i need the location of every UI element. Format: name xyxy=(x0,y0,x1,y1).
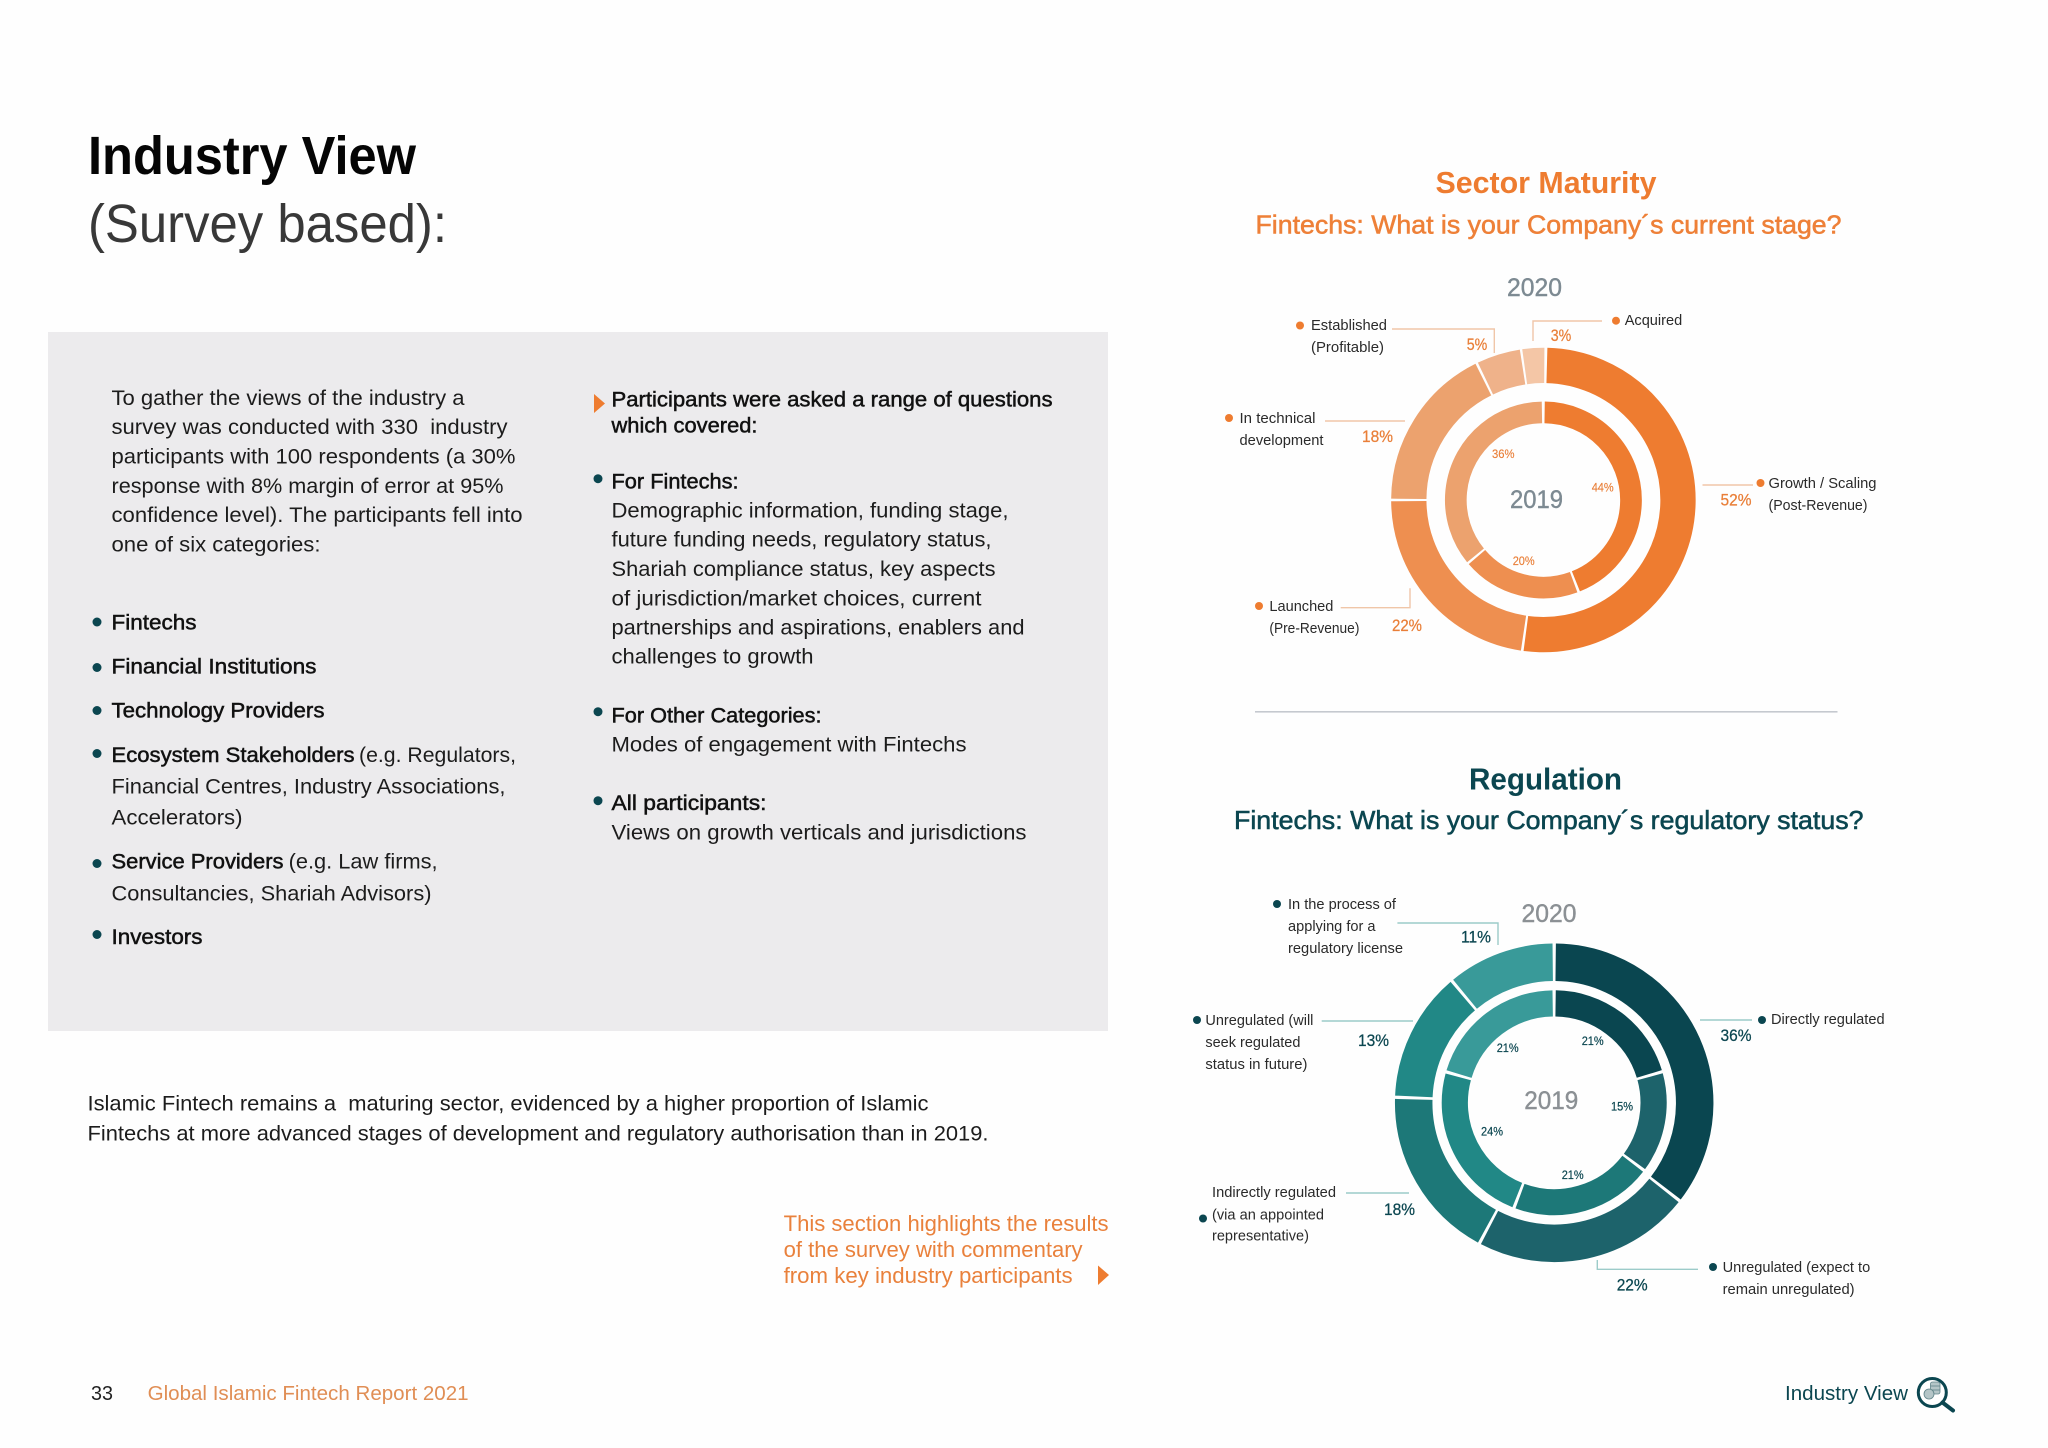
text block: for fintechs: future funding needs, regulatory status, xyxy=(612,528,992,552)
title: Industry View xyxy=(88,126,417,186)
label: growth scaling: Growth / Scaling xyxy=(1768,475,1876,492)
list: participant categories: (e.g. Regulators, xyxy=(359,743,516,767)
text block: for fintechs xyxy=(594,469,1024,669)
outer ring 2020 xyxy=(1356,905,1752,1301)
callout: section note: This section highlights the results xyxy=(784,1211,1109,1236)
text block: for fintechs: For Fintechs: xyxy=(612,469,738,493)
text block: for fintechs: of jurisdiction/market choices, current xyxy=(612,586,982,610)
text block: survey intro: survey was conducted with 330 industry xyxy=(112,415,508,439)
text block: survey intro: one of six categories: xyxy=(112,532,320,556)
label: in the process xyxy=(1273,896,1498,957)
chart labels: sector maturity: 44% xyxy=(1592,481,1614,495)
text block: conclusion: Fintechs at more advanced stages of development and regulatory authorisation than in 2019. xyxy=(88,1122,988,1146)
label: unregulated will seek xyxy=(1193,1012,1413,1073)
list: participant categories: (e.g. Law firms, xyxy=(289,850,438,874)
list: participant categories: Service Providers xyxy=(112,850,284,874)
chart labels: sector maturity: 2020 xyxy=(1507,274,1562,302)
label: unregulated expect to remain xyxy=(1597,1259,1870,1298)
text block: survey intro: response with 8% margin of error at 95% xyxy=(112,474,504,498)
label: launched xyxy=(1255,588,1422,637)
heading: regulation: Regulation xyxy=(1469,762,1622,797)
outer ring 2020 xyxy=(1364,321,1723,679)
label: unregulated will seek: 13% xyxy=(1358,1032,1389,1050)
label: directly regulated xyxy=(1700,1011,1885,1045)
chart labels: regulation: 24% xyxy=(1481,1125,1503,1139)
list: participant categories: Ecosystem Stakeholders xyxy=(112,743,354,767)
label: in technical development: development xyxy=(1240,432,1324,449)
inner ring 2019 xyxy=(1415,963,1694,1242)
text block: survey intro: To gather the views of the industry a xyxy=(112,386,465,410)
label: unregulated expect to remain: remain unregulated) xyxy=(1723,1281,1855,1298)
label: in the process: 11% xyxy=(1461,928,1491,946)
chart labels: regulation: 21% xyxy=(1562,1168,1584,1182)
text block: for other categories: Modes of engagement with Fintechs xyxy=(612,732,966,756)
chart labels: regulation: 15% xyxy=(1611,1100,1633,1114)
label: directly regulated: Directly regulated xyxy=(1771,1011,1885,1028)
text block: questions heading xyxy=(594,388,1052,438)
callout: section note: from key industry participants xyxy=(784,1263,1073,1288)
chart labels: sector maturity: 2019 xyxy=(1510,486,1563,514)
label: unregulated will seek: Unregulated (will xyxy=(1205,1012,1313,1029)
text block: all participants: All participants: xyxy=(612,791,766,815)
label: directly regulated: 36% xyxy=(1720,1027,1752,1045)
label: growth scaling: (Post-Revenue) xyxy=(1768,497,1868,514)
label: in technical development: 18% xyxy=(1362,428,1393,446)
label: established xyxy=(1296,317,1494,356)
text block: conclusion: Islamic Fintech remains a maturing sector, evidenced by a higher proportion of Islamic xyxy=(88,1092,929,1116)
label: unregulated expect to remain: Unregulated (expect to xyxy=(1723,1259,1870,1276)
chart labels: regulation: 21% xyxy=(1582,1034,1604,1048)
label: in the process: applying for a xyxy=(1288,918,1376,935)
list: participant categories: Investors xyxy=(112,925,202,949)
text block: survey intro: confidence level). The participants fell into xyxy=(112,503,523,527)
chart labels: regulation: 21% xyxy=(1497,1041,1519,1055)
text block: for fintechs: partnerships and aspirations, enablers and xyxy=(612,616,1024,640)
text block: for other categories xyxy=(594,704,966,756)
text block: for other categories: For Other Categories: xyxy=(612,704,822,728)
label: in technical development xyxy=(1225,410,1405,449)
text block: survey intro xyxy=(112,386,523,556)
text block: for fintechs: challenges to growth xyxy=(612,645,814,669)
callout: section note: of the survey with commentary xyxy=(784,1237,1083,1262)
arrow: next xyxy=(1098,1266,1109,1285)
icon: magnifier with coins xyxy=(1918,1378,1953,1410)
list: participant categories: Financial Centres, Industry Associations, xyxy=(112,774,506,798)
chart: sector maturity donut xyxy=(1364,321,1723,679)
label: in technical development: In technical xyxy=(1240,410,1316,427)
label: indirectly regulated: Indirectly regulated xyxy=(1212,1184,1336,1201)
label: launched: Launched xyxy=(1269,598,1333,615)
label: indirectly regulated: representative) xyxy=(1212,1228,1309,1244)
label: established: 5% xyxy=(1467,336,1487,354)
label: growth scaling xyxy=(1702,475,1876,514)
label: indirectly regulated: (via an appointed xyxy=(1212,1206,1324,1224)
list: participant categories: Fintechs xyxy=(112,610,196,634)
text block: survey intro: participants with 100 respondents (a 30% xyxy=(112,444,516,468)
label: acquired: 3% xyxy=(1551,327,1571,345)
list: participant categories: Technology Providers xyxy=(112,698,324,722)
label: indirectly regulated: 18% xyxy=(1384,1201,1415,1219)
label: unregulated will seek: status in future) xyxy=(1205,1056,1307,1073)
label: established: Established xyxy=(1311,317,1387,334)
label: launched: 22% xyxy=(1392,617,1422,635)
footer: page number and report name: 33 xyxy=(91,1383,113,1405)
list: participant categories: Consultancies, Shariah Advisors) xyxy=(112,882,432,906)
text block: for fintechs: Shariah compliance status, key aspects xyxy=(612,557,996,581)
chart labels: regulation xyxy=(1193,896,1885,1298)
label: unregulated expect to remain: 22% xyxy=(1617,1277,1648,1295)
text block: conclusion xyxy=(88,1092,988,1146)
chart labels: sector maturity: 36% xyxy=(1492,447,1515,461)
heading: regulation xyxy=(1234,762,1864,835)
text block: questions heading: Participants were asked a range of questions xyxy=(612,388,1052,412)
label: unregulated will seek: seek regulated xyxy=(1205,1034,1300,1051)
list: participant categories: Accelerators) xyxy=(112,806,242,830)
label: in the process: regulatory license xyxy=(1288,940,1403,957)
label: indirectly regulated xyxy=(1199,1184,1415,1244)
text block: for fintechs: Demographic information, funding stage, xyxy=(612,499,1008,523)
heading: sector maturity xyxy=(1256,165,1842,240)
label: acquired xyxy=(1533,312,1682,345)
heading: sector maturity: Sector Maturity xyxy=(1436,165,1657,200)
chart labels: sector maturity: 20% xyxy=(1513,554,1535,568)
chart labels: regulation: 2020 xyxy=(1522,900,1576,928)
heading: regulation: Fintechs: What is your Company´s regulatory status? xyxy=(1234,805,1864,835)
callout: section note xyxy=(784,1211,1109,1288)
chart labels: regulation: 2019 xyxy=(1524,1087,1578,1115)
footer: section name: Industry View xyxy=(1785,1383,1909,1405)
inner ring 2019 xyxy=(1420,377,1667,623)
text block: questions heading: which covered: xyxy=(610,414,758,438)
label: launched: (Pre-Revenue) xyxy=(1269,620,1359,637)
label: established: (Profitable) xyxy=(1311,339,1384,356)
heading: sector maturity: Fintechs: What is your Company´s current stage? xyxy=(1256,210,1842,240)
title: (Survey based): xyxy=(88,194,447,254)
label: acquired: Acquired xyxy=(1625,312,1682,329)
panel: survey description xyxy=(48,332,1108,1031)
label: growth scaling: 52% xyxy=(1720,492,1752,510)
chart labels: sector maturity xyxy=(1225,274,1876,637)
footer: page number and report name: Global Islamic Fintech Report 2021 xyxy=(148,1383,469,1405)
list: participant categories: Financial Institutions xyxy=(112,654,316,678)
text block: all participants: Views on growth verticals and jurisdictions xyxy=(612,820,1026,844)
list: participant categories xyxy=(92,610,516,949)
chart: regulation donut xyxy=(1356,905,1752,1301)
label: in the process: In the process of xyxy=(1288,896,1397,913)
title xyxy=(88,126,447,254)
text block: all participants xyxy=(594,791,1026,844)
